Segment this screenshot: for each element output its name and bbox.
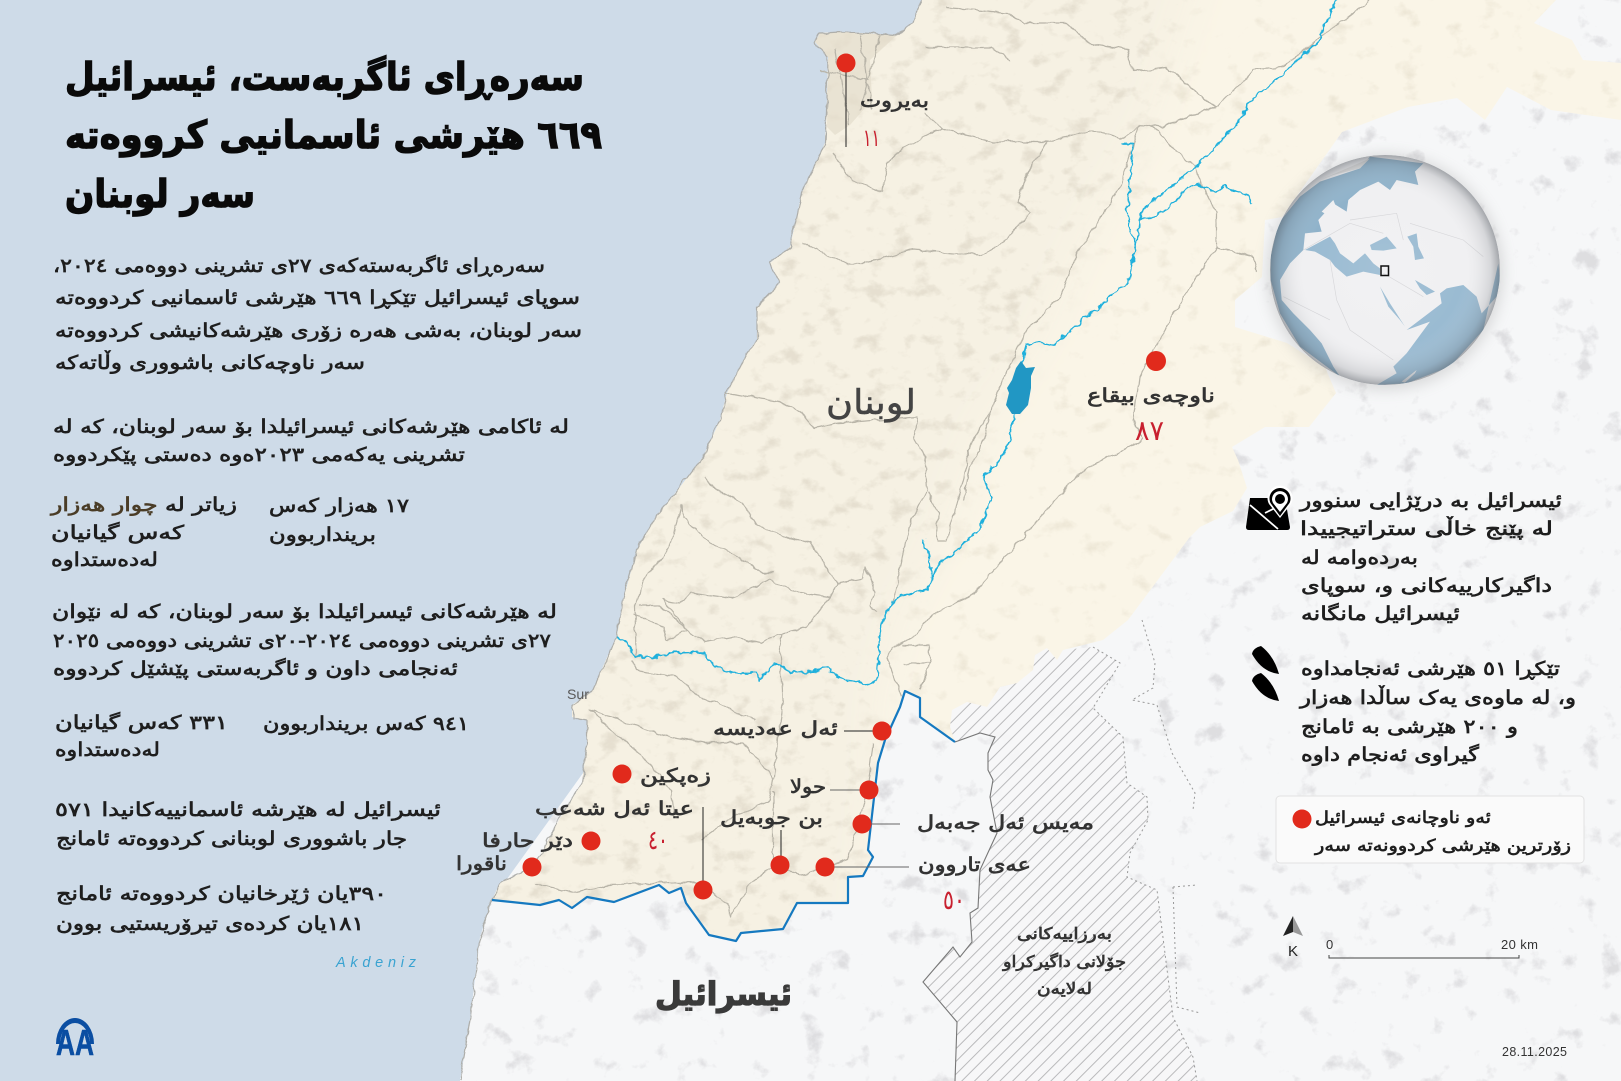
text block: ceasefire violations: ئەنجامی داون و ئاگربەستی پێشێل کردووە bbox=[53, 657, 458, 680]
marker: Aitaroun: عەی تاروون bbox=[918, 854, 1031, 876]
map: Israel-Lebanon border bbox=[492, 691, 955, 941]
marker: Bint Jbeil: بن جوبەیل bbox=[720, 807, 823, 829]
text block: five strategic points: داگیرکارییەکانی و، سوپای bbox=[1301, 574, 1552, 597]
stat: wounded since 2023: برینداربوون bbox=[269, 524, 376, 546]
date: 28.11.2025 bbox=[1502, 1045, 1567, 1059]
logo: AA bbox=[56, 1018, 94, 1063]
stat: 331 dead bbox=[55, 711, 228, 761]
label: Golan Heights: جۆلانی داگیرکراو bbox=[1002, 952, 1126, 972]
marker: Zebqine: زەپکین bbox=[640, 765, 711, 787]
marker: Houla: حولا bbox=[790, 776, 826, 798]
country label: Lebanon: لوبنان bbox=[826, 383, 916, 423]
text block: 571 air strikes bbox=[55, 799, 441, 850]
text block: ceasefire violations: لە هێرشەکانی ئیسرائیلدا بۆ سەر لوبنان، کە لە نێوان bbox=[52, 601, 557, 623]
marker: Naqoura: ناقورا bbox=[456, 853, 507, 875]
label: Golan Heights: بەرزاییەکانی bbox=[1017, 924, 1112, 944]
text block: five strategic points: لە پێنج خاڵی ستراتیجییدا bbox=[1300, 516, 1553, 540]
globe locator bbox=[1267, 154, 1503, 390]
marker: Aitaroun: ٥٠ bbox=[943, 885, 965, 916]
marker: Aita al-Shaab: ٤٠ bbox=[648, 825, 668, 856]
legend: زۆرترین هێرشی کردوونەتە سەر bbox=[1314, 836, 1571, 856]
legend: ئەو ناوچانەی ئیسرائیل bbox=[1315, 808, 1491, 828]
marker: Beirut: ١١ bbox=[863, 124, 880, 152]
text block: war since 2023: لە ئاکامی هێرشەکانی ئیسرائیلدا بۆ سەر لوبنان، کە لە bbox=[53, 416, 569, 438]
scale bar bbox=[1326, 937, 1538, 958]
text block: ceasefire summary: سەر لوبنان، بەشی هەرە زۆری هێرشەکانیشی کردووەتە bbox=[55, 320, 582, 342]
marker: Bekaa: ٨٧ bbox=[1135, 414, 1164, 447]
icon: bullets bbox=[1252, 646, 1279, 701]
marker: Bekaa: ناوچەی بیقاع bbox=[1087, 385, 1215, 407]
map: Lebanon and Syria beige area bbox=[493, 0, 1621, 940]
text block: 51 attacks: و، لە ماوەی یەک ساڵدا هەزار bbox=[1299, 685, 1576, 709]
label: Golan Heights: لەلایەن bbox=[1037, 979, 1092, 998]
logo: AA: AA bbox=[56, 1022, 94, 1063]
stat: 941 wounded: ٩٤١ کەس برینداربوون bbox=[263, 713, 469, 735]
city label: Sur: Sur bbox=[567, 686, 589, 702]
title: سەرەڕای ئاگربەست، ئیسرائیل bbox=[65, 55, 584, 99]
title: ٦٦٩ هێرشی ئاسمانیی کرووەتە bbox=[65, 113, 602, 158]
north arrow: K bbox=[1288, 943, 1298, 960]
marker: Aita al-Shaab: عیتا ئەل شەعب bbox=[535, 798, 694, 820]
map: lake bbox=[1006, 361, 1035, 414]
text block: targets bbox=[56, 883, 387, 935]
marker: Mays al-Jabal: مەیس ئەل جەبەل bbox=[917, 812, 1094, 834]
text block: ceasefire summary: سەر ناوچەکانی باشووری وڵاتەکە bbox=[55, 350, 365, 374]
marker: Bint Jbeil bbox=[720, 807, 823, 874]
text block: ceasefire summary: سەرەڕای ئاگربەستەکەی ٢٧ی تشرینی دووەمی ٢٠٢٤، bbox=[53, 254, 545, 277]
text block: 51 attacks: گیراوی ئەنجام داوە bbox=[1301, 743, 1480, 766]
icon: map with pin bbox=[1246, 486, 1292, 530]
map: Golan Heights hatched area bbox=[923, 620, 1200, 1081]
marker: Al-Adaisa bbox=[713, 718, 892, 740]
scale bar: 20 km bbox=[1501, 937, 1538, 952]
stat: 331 dead: لەدەستداوە bbox=[55, 739, 160, 761]
stat: deaths since 2023: لەدەستداوە bbox=[51, 549, 158, 571]
text block: five strategic points: ئیسرائیل مانگانە bbox=[1301, 602, 1460, 625]
title bbox=[65, 55, 602, 216]
text block: 571 air strikes: جار باشووری لوبنانی کردووەتە ئامانج bbox=[56, 828, 407, 850]
text block: ceasefire summary bbox=[53, 254, 582, 374]
text block: five strategic points: ئیسرائیل بە درێژایی سنوور bbox=[1299, 490, 1562, 512]
text block: ceasefire summary: سوپای ئیسرائیل تێکڕا ٦٦٩ هێرشی ئاسمانیی کردووەتە bbox=[55, 287, 580, 309]
marker: Beirut: بەیروت bbox=[860, 90, 929, 112]
legend bbox=[1276, 796, 1584, 863]
marker: Beirut bbox=[836, 54, 929, 152]
text block: five strategic points: بەردەوامە لە bbox=[1301, 547, 1418, 569]
map: Beirut city area bbox=[815, 32, 897, 135]
text block: targets: ٣٩٠یان ژێرخانیان کردووەتە ئامانج bbox=[56, 883, 387, 905]
text block: five strategic points bbox=[1299, 490, 1562, 625]
map: coast outline bbox=[460, 0, 922, 1081]
stat: wounded since 2023: ١٧ هەزار کەس bbox=[269, 495, 409, 517]
scale bar: 0 bbox=[1326, 937, 1333, 952]
marker: Houla bbox=[790, 776, 878, 800]
country label: Israel: ئیسرائیل bbox=[655, 975, 792, 1013]
map: rivers bbox=[617, 0, 1337, 685]
north arrow bbox=[1283, 916, 1303, 960]
marker: Deir Harfa: دێر حارفا bbox=[482, 830, 573, 852]
stat: 331 dead: ٣٣١ کەس گیانیان bbox=[55, 711, 228, 734]
text block: targets: ١٨١یان کردەی تیرۆریستیی بوون bbox=[56, 913, 364, 935]
text block: 51 attacks: و ٢٠٠ هێرشی بە ئامانج bbox=[1301, 716, 1518, 738]
marker: Al-Adaisa: ئەل عەدیسە bbox=[713, 718, 838, 740]
text block: 51 attacks bbox=[1299, 658, 1576, 766]
sea label: Akdeniz bbox=[335, 955, 417, 971]
marker: Mays al-Jabal bbox=[852, 812, 1094, 834]
map: land base bbox=[460, 0, 1621, 1081]
text block: 571 air strikes: ئیسرائیل لە هێرشە ئاسمانییەکانیدا ٥٧١ bbox=[55, 799, 441, 821]
marker: Naqoura bbox=[456, 853, 542, 876]
stat: deaths since 2023 bbox=[50, 494, 237, 571]
marker: Aitaroun bbox=[816, 854, 1031, 916]
text block: war since 2023 bbox=[53, 416, 569, 466]
stat: deaths since 2023: زیاتر لە چوار هەزار bbox=[50, 494, 237, 516]
marker: Bekaa bbox=[1087, 351, 1215, 447]
map: internal boundaries bbox=[535, 0, 1370, 915]
text block: 51 attacks: تێکڕا ٥١ هێرشی ئەنجامداوە bbox=[1301, 658, 1560, 680]
text block: ceasefire violations bbox=[52, 601, 557, 680]
marker: Deir Harfa bbox=[482, 830, 600, 852]
marker: Aita al-Shaab bbox=[535, 798, 712, 900]
marker: Zebqine bbox=[612, 764, 711, 787]
text block: war since 2023: تشرینی یەکەمی ٢٠٢٣ەوە دەستی پێکردووە bbox=[53, 444, 465, 466]
label: Golan Heights bbox=[1002, 924, 1126, 998]
title: سەر لوبنان bbox=[65, 172, 255, 216]
stat: wounded since 2023 bbox=[269, 495, 409, 546]
text block: ceasefire violations: ٢٧ی تشرینی دووەمی ٢٠٢٤-٢٠ی تشرینی دووەمی ٢٠٢٥ bbox=[53, 630, 551, 652]
stat: deaths since 2023: کەس گیانیان bbox=[51, 521, 185, 544]
